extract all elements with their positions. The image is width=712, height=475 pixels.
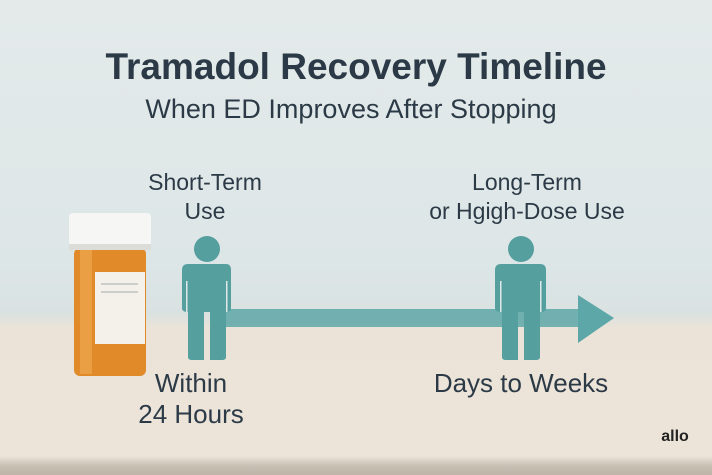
label: long-term <box>429 169 625 224</box>
label: within 24 hours: Within <box>155 368 227 398</box>
label: short-term: Use <box>185 198 225 224</box>
subtitle: When ED Improves After Stopping <box>145 94 557 124</box>
logo: allo <box>661 428 689 445</box>
label: within 24 hours <box>138 368 244 429</box>
label: short-term <box>148 169 262 224</box>
label: within 24 hours: 24 Hours <box>138 399 244 429</box>
label: long-term: Long-Term <box>472 169 582 195</box>
label: long-term: or Hgigh-Dose Use <box>429 198 625 224</box>
label: days to weeks: Days to Weeks <box>434 368 608 398</box>
title: Tramadol Recovery Timeline <box>105 46 607 87</box>
label: short-term: Short-Term <box>148 169 262 195</box>
